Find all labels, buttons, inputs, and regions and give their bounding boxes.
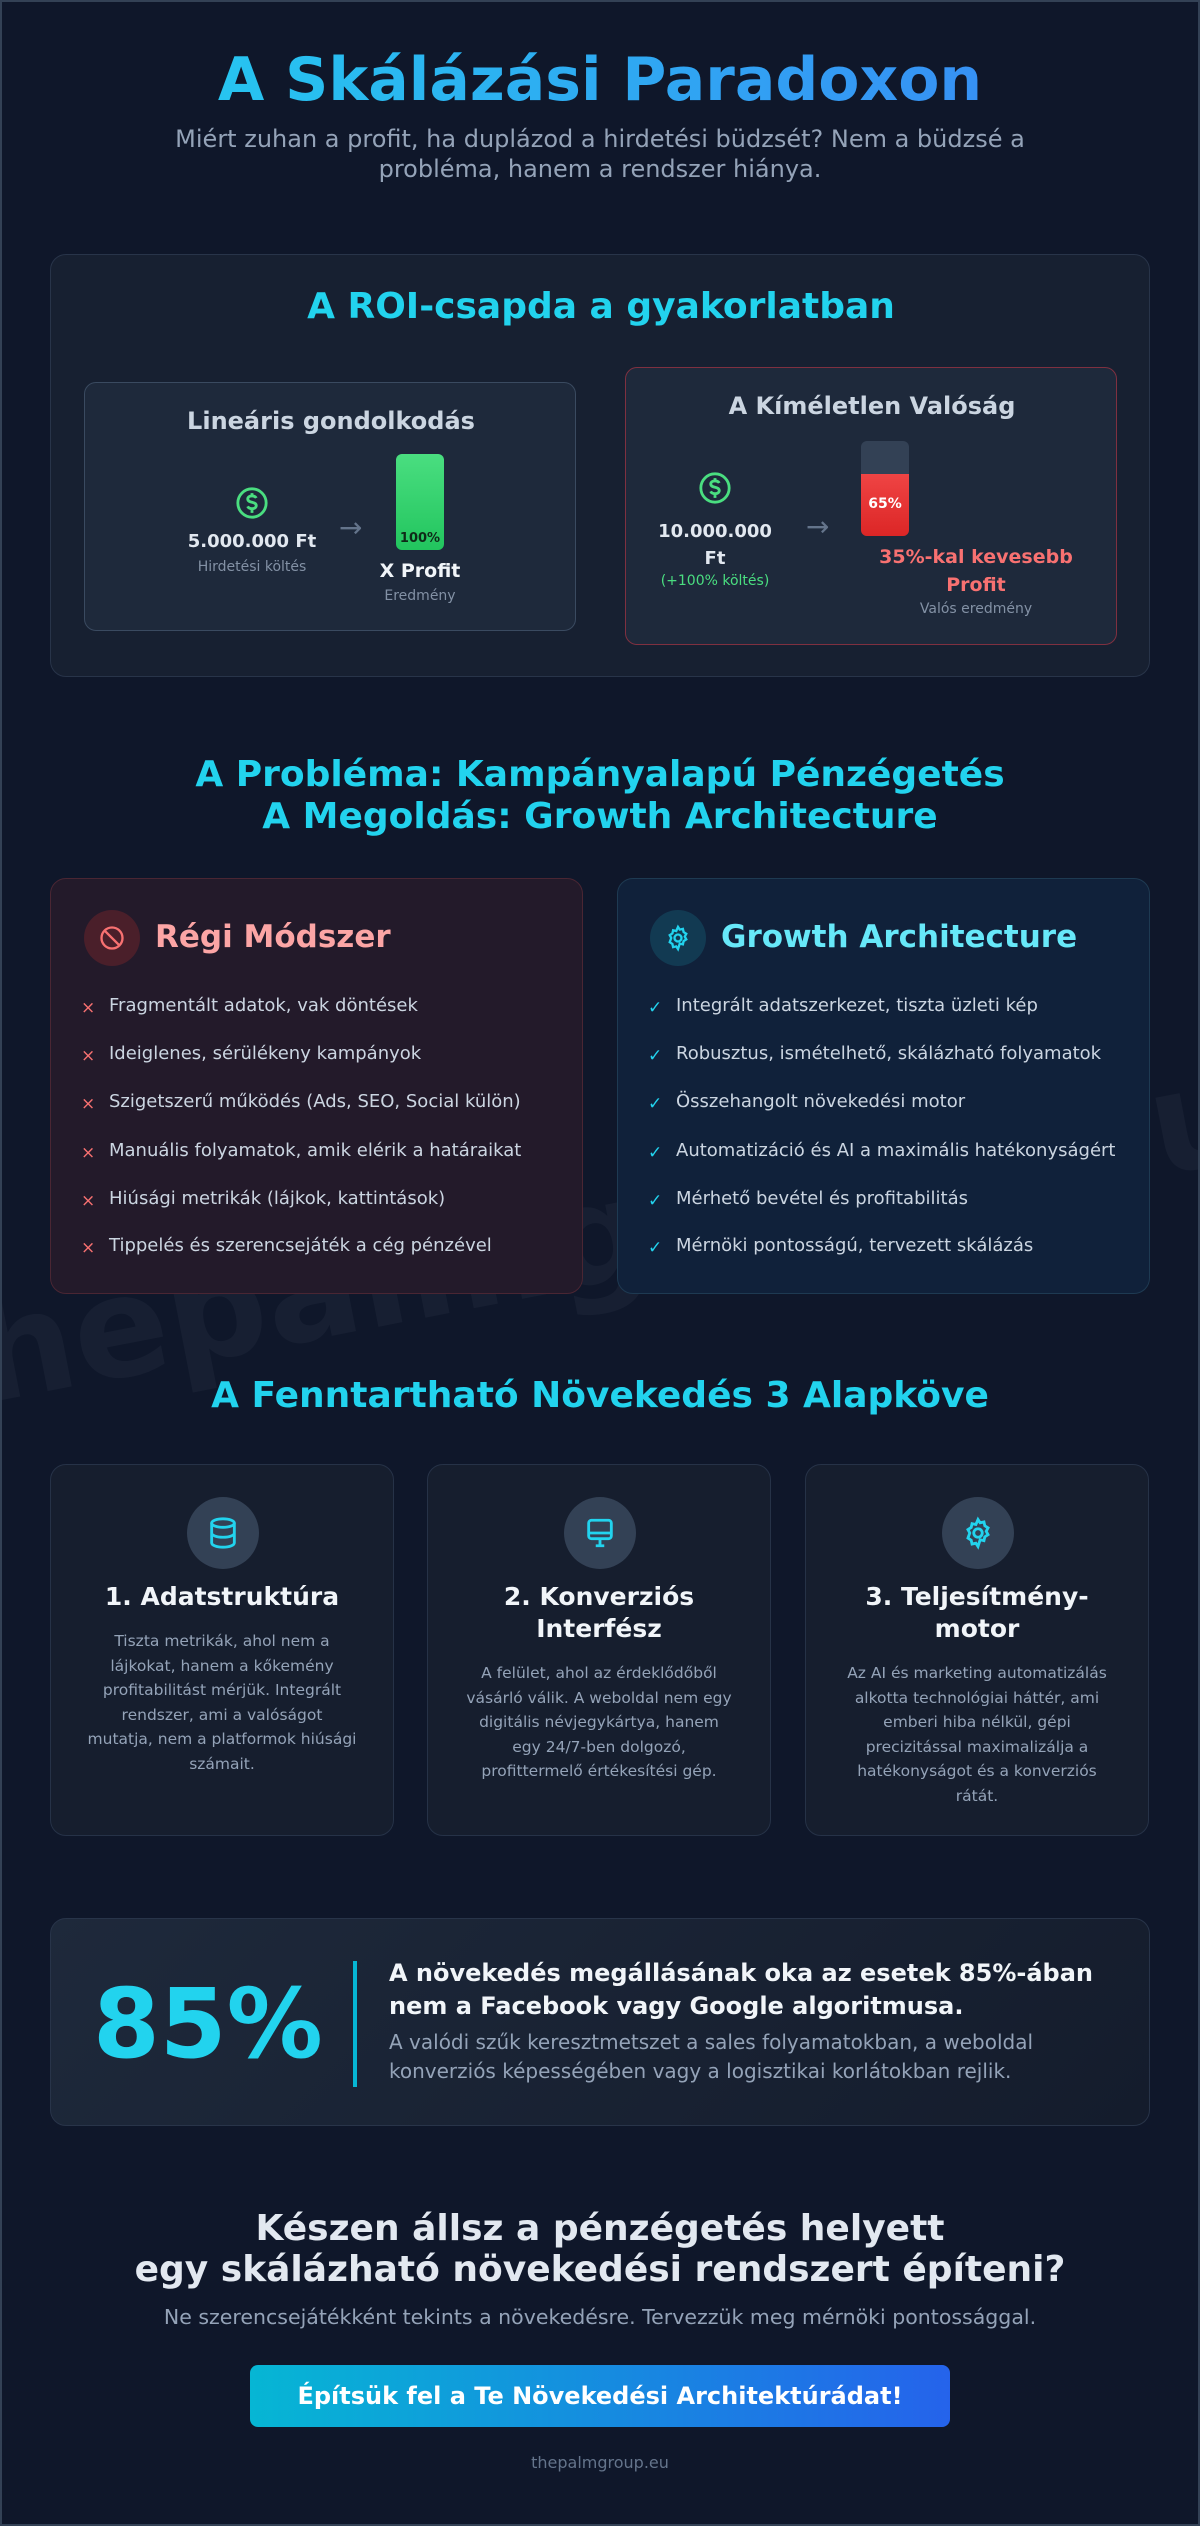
card: conversion interface: profittermelő értékesítési gép. <box>481 1762 717 1780</box>
card: conversion interface: egy 24/7-ben dolgozó, <box>512 1738 686 1756</box>
icon: database <box>187 1497 259 1569</box>
card: conversion interface: vásárló válik. A weboldal nem egy <box>466 1688 732 1706</box>
subtitle: Miért zuhan a profit, ha duplázod a hirdetési büdzsét? Nem a büdzsé a probléma, hanem a rendszer hiánya. <box>175 125 1025 183</box>
list: new: Mérnöki pontosságú, tervezett skálázás <box>676 1235 1033 1256</box>
card: linear thinking: X Profit <box>380 560 460 582</box>
CTA button: Építsük fel a Te Növekedési Architektúrádat! <box>297 2382 903 2410</box>
stat text <box>389 1959 1093 2083</box>
amount: 10.000.000 <box>658 521 772 542</box>
bar: 65% <box>861 441 909 536</box>
stat text: A növekedés megállásának oka az esetek 85%-ában nem a Facebook vagy Google algoritmusa. <box>389 1959 1093 2020</box>
CTA heading: egy skálázható növekedési rendszert építeni? <box>135 2249 1065 2290</box>
stat callout: 85% <box>50 1918 1150 2126</box>
card: performance engine: Az AI és marketing automatizálás <box>847 1664 1107 1682</box>
CTA button <box>250 2365 950 2427</box>
CTA heading: Készen állsz a pénzégetés helyett <box>256 2208 944 2249</box>
list: old: × <box>81 998 95 1018</box>
card: performance engine: hatékonyságot és a konverziós <box>857 1762 1097 1780</box>
list: old: Ideiglenes, sérülékeny kampányok <box>109 1043 421 1064</box>
card: performance engine: precizitással maximalizálja a <box>866 1738 1088 1756</box>
list: old: × <box>81 1143 95 1163</box>
panel title: Régi Módszer <box>155 919 391 955</box>
card: harsh reality: (+100% költés) <box>661 573 769 589</box>
card: linear thinking: Hirdetési költés <box>198 559 306 575</box>
card: performance engine: rátát. <box>956 1786 998 1804</box>
amount: Ft <box>705 548 725 569</box>
list: new: ✓ <box>648 1191 662 1211</box>
heading: problem / solution <box>195 754 1005 837</box>
divider line <box>353 1961 357 2087</box>
card: conversion interface: A felület, ahol az érdeklődőből <box>481 1664 717 1682</box>
result: 35%-kal kevesebb <box>879 546 1073 568</box>
icon: gear <box>650 910 706 966</box>
heading: ROI: A ROI-csapda a gyakorlatban <box>307 286 895 327</box>
arrow: → <box>339 511 362 544</box>
list: new: Robusztus, ismételhető, skálázható folyamatok <box>676 1043 1101 1064</box>
list: old: × <box>81 1046 95 1066</box>
card: linear thinking <box>84 382 576 631</box>
list: old: Manuális folyamatok, amik elérik a határaikat <box>109 1140 521 1161</box>
list: new: ✓ <box>648 1143 662 1163</box>
card: data structure: rendszer, ami a valóságot <box>122 1706 322 1724</box>
panel: old method <box>50 878 583 1294</box>
list: new: Mérhető bevétel és profitabilitás <box>676 1188 968 1209</box>
list: old: × <box>81 1191 95 1211</box>
card: linear thinking: Eredmény <box>384 588 456 604</box>
list: old: Tippelés és szerencsejáték a cég pénzével <box>109 1235 492 1256</box>
bar: 65%: 65% <box>868 496 902 512</box>
heading: pillars: A Fenntartható Növekedés 3 Alapköve <box>211 1375 989 1416</box>
list: old: Szigetszerű működés (Ads, SEO, Social külön) <box>109 1091 521 1112</box>
list: new <box>648 995 1115 1258</box>
card: data structure: számait. <box>189 1754 255 1772</box>
card: performance engine <box>805 1464 1149 1836</box>
heading: problem / solution: A Probléma: Kampányalapú Pénzégetés <box>195 754 1005 795</box>
card: conversion interface: Interfész <box>536 1614 662 1643</box>
card: data structure: mutatja, nem a platformok hiúsági <box>88 1730 356 1748</box>
card: performance engine: alkotta technológiai háttér, ami <box>855 1688 1099 1706</box>
card: data structure: 1. Adatstruktúra <box>105 1582 339 1611</box>
icon: gear <box>942 1497 1014 1569</box>
amount <box>658 521 772 569</box>
arrow: → <box>806 510 829 543</box>
list: new: ✓ <box>648 998 662 1018</box>
card title: A Kíméletlen Valóság <box>729 392 1015 420</box>
card: performance engine: 3. Teljesítmény- <box>865 1582 1089 1611</box>
list: old: × <box>81 1238 95 1258</box>
icon: dollar <box>236 487 268 519</box>
amount: 5.000.000 Ft <box>188 531 316 552</box>
card: data structure: lájkokat, hanem a kőkemény <box>110 1656 334 1674</box>
card: performance engine: motor <box>935 1614 1019 1643</box>
card: data structure: profitabilitást mérjük. Integrált <box>103 1681 341 1699</box>
footer: thepalmgroup.eu <box>531 2453 669 2472</box>
panel title: Growth Architecture <box>721 919 1077 955</box>
panel: ROI trap <box>50 254 1150 677</box>
list: old: Hiúsági metrikák (lájkok, kattintások) <box>109 1188 445 1209</box>
card: harsh reality: Valós eredmény <box>920 601 1032 617</box>
card: conversion interface: digitális névjegykártya, hanem <box>479 1713 719 1731</box>
icon: ban <box>84 910 140 966</box>
card: conversion interface: 2. Konverziós <box>504 1582 694 1611</box>
card: data structure: Tiszta metrikák, ahol nem a <box>114 1632 330 1650</box>
icon: monitor <box>564 1497 636 1569</box>
list: old: Fragmentált adatok, vak döntések <box>109 995 418 1016</box>
list: new: ✓ <box>648 1046 662 1066</box>
result <box>879 546 1073 596</box>
list: new: Összehangolt növekedési motor <box>676 1091 965 1112</box>
big number: 85% <box>93 1968 323 2080</box>
list: old <box>81 995 521 1258</box>
card: harsh reality <box>625 367 1117 645</box>
CTA heading <box>135 2208 1065 2290</box>
result: Profit <box>946 574 1006 596</box>
list: new: Integrált adatszerkezet, tiszta üzleti kép <box>676 995 1038 1016</box>
title <box>0 40 1200 120</box>
heading: problem / solution: A Megoldás: Growth Architecture <box>262 796 938 837</box>
CTA subtitle: Ne szerencsejátékként tekints a növekedésre. Tervezzük meg mérnöki pontossággal. <box>164 2305 1036 2329</box>
card: data structure <box>50 1464 394 1836</box>
card: conversion interface <box>427 1464 771 1836</box>
icon: dollar <box>699 472 731 504</box>
list: old: × <box>81 1094 95 1114</box>
list: new: ✓ <box>648 1238 662 1258</box>
list: new: Automatizáció és AI a maximális hatékonyságért <box>676 1140 1115 1161</box>
bar: 100%: 100% <box>400 531 440 546</box>
card title: Lineáris gondolkodás <box>187 407 475 435</box>
stat text: A valódi szűk keresztmetszet a sales folyamatokban, a weboldal konverziós képességében vagy a logisztikai korlátokban rejlik. <box>389 2030 1033 2083</box>
card: performance engine: emberi hiba nélkül, gépi <box>883 1713 1071 1731</box>
bar: 100% <box>396 454 444 550</box>
title: A Skálázási Paradoxon <box>218 45 982 115</box>
panel: growth architecture <box>617 878 1150 1294</box>
list: new: ✓ <box>648 1094 662 1114</box>
